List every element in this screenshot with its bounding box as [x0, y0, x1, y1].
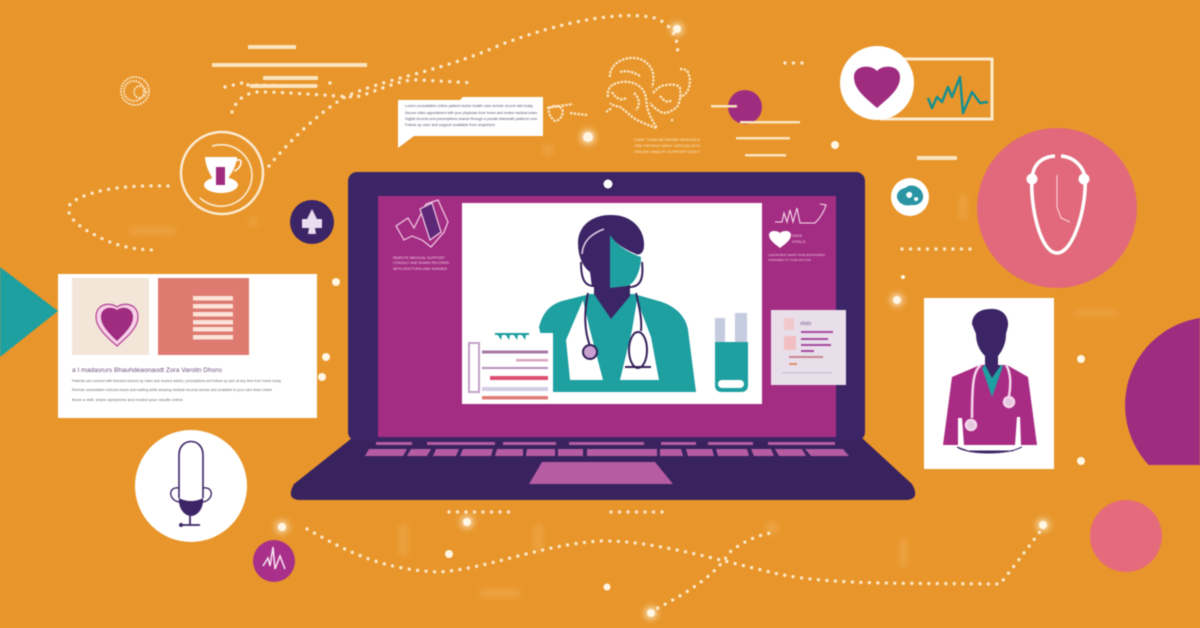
card body text: Patients can connect with licensed doctors by video and receive advice, prescriptions and follow up care at any time from home today — [72, 379, 281, 383]
speech bubble: Digital records and prescriptions shared through a private telehealth platform now — [405, 117, 538, 121]
faint background smudges — [130, 145, 1117, 597]
left article card — [58, 274, 317, 418]
speech bubble: Follow up care and support available from anywhere — [405, 123, 495, 127]
accent bar — [917, 156, 957, 160]
neck and head — [972, 309, 1008, 378]
laptop base — [291, 438, 915, 500]
icon: coffee cup — [181, 132, 263, 214]
white coat lapels — [566, 300, 659, 380]
icon: heartbeat badge — [253, 540, 295, 582]
microphone circle — [135, 430, 247, 542]
icon: dark badge — [290, 200, 334, 244]
teal triangle — [0, 267, 58, 357]
screen right chart and text: DATA — [792, 233, 802, 238]
floating report card — [771, 310, 846, 385]
screen right chart and text — [768, 204, 826, 262]
card title: a I madasrurs Bhauhdeaonaodt Zora Varoitn Dhsns — [72, 367, 222, 374]
screen right chart and text: VITALS — [792, 239, 806, 244]
speech bubble — [398, 97, 543, 148]
stethoscope — [966, 365, 1014, 430]
caption under heads: ONE PATIENT MANY SPECIALISTS — [634, 144, 700, 148]
doodle: dotted heads — [547, 58, 690, 128]
screen right chart and text: STREAMED TO YOUR DOCTOR — [768, 258, 812, 262]
stethoscope — [581, 262, 651, 368]
speech bubble: Secure video appointment with your physician from home and review medical notes — [405, 111, 537, 115]
heart — [96, 304, 138, 346]
card body text: Book a visit, share symptoms and review your results online — [72, 398, 183, 402]
purple half circle — [1124, 318, 1200, 466]
stethoscope circle — [977, 128, 1137, 288]
hands — [957, 447, 1022, 453]
purple dot with lines — [711, 90, 800, 156]
screen left icon and text: WITH DOCTORS AND NURSES — [393, 267, 447, 271]
doctor body — [539, 294, 696, 392]
face — [610, 235, 641, 288]
floating report card: vitals — [800, 321, 812, 327]
screen right chart and text: LIVE PATIENT HEART RATE MONITORING — [768, 253, 826, 257]
screen left icon and text: CONSULT AND SHARE RECORDS — [393, 261, 449, 265]
cup of pens — [715, 313, 748, 392]
icon: teal badge — [891, 178, 929, 216]
heart monitor icon — [840, 46, 992, 120]
caption under heads — [634, 138, 700, 154]
keyboard — [365, 442, 849, 456]
speech bubble: Lorem consultation online patient doctor health care remote record visit today — [405, 104, 533, 108]
hair — [578, 215, 644, 287]
pink circle — [1090, 500, 1162, 572]
trackpad — [529, 462, 673, 484]
camera — [604, 180, 612, 188]
hair highlight — [582, 229, 604, 254]
list bars — [193, 296, 233, 340]
screen left icon and text — [393, 200, 449, 271]
right doctor card — [924, 298, 1054, 469]
laptop — [291, 172, 915, 500]
laptop lid — [348, 172, 865, 441]
coat stripes — [958, 417, 1021, 445]
card body text: Remote consultation reduces travel and waiting while keeping medical records secure and available to your care team online — [72, 388, 272, 392]
card body text — [72, 379, 281, 402]
caption under heads: CARE TEAM NETWORK SERVICES — [634, 138, 700, 142]
small dotted ring icon — [121, 77, 149, 105]
dotted connector lines — [69, 16, 1045, 612]
figure body — [943, 365, 1037, 445]
clipboard — [468, 333, 553, 402]
screen — [378, 196, 836, 437]
neck — [594, 285, 630, 319]
screen left icon and text: REMOTE MEDICAL SUPPORT — [393, 256, 445, 260]
video panel with doctor — [462, 203, 762, 404]
caption under heads: ONLINE HEALTH SUPPORT DAILY — [634, 150, 700, 154]
glowing light dots — [276, 23, 1085, 619]
teal collar — [982, 365, 1003, 397]
top left text bars — [212, 45, 367, 88]
